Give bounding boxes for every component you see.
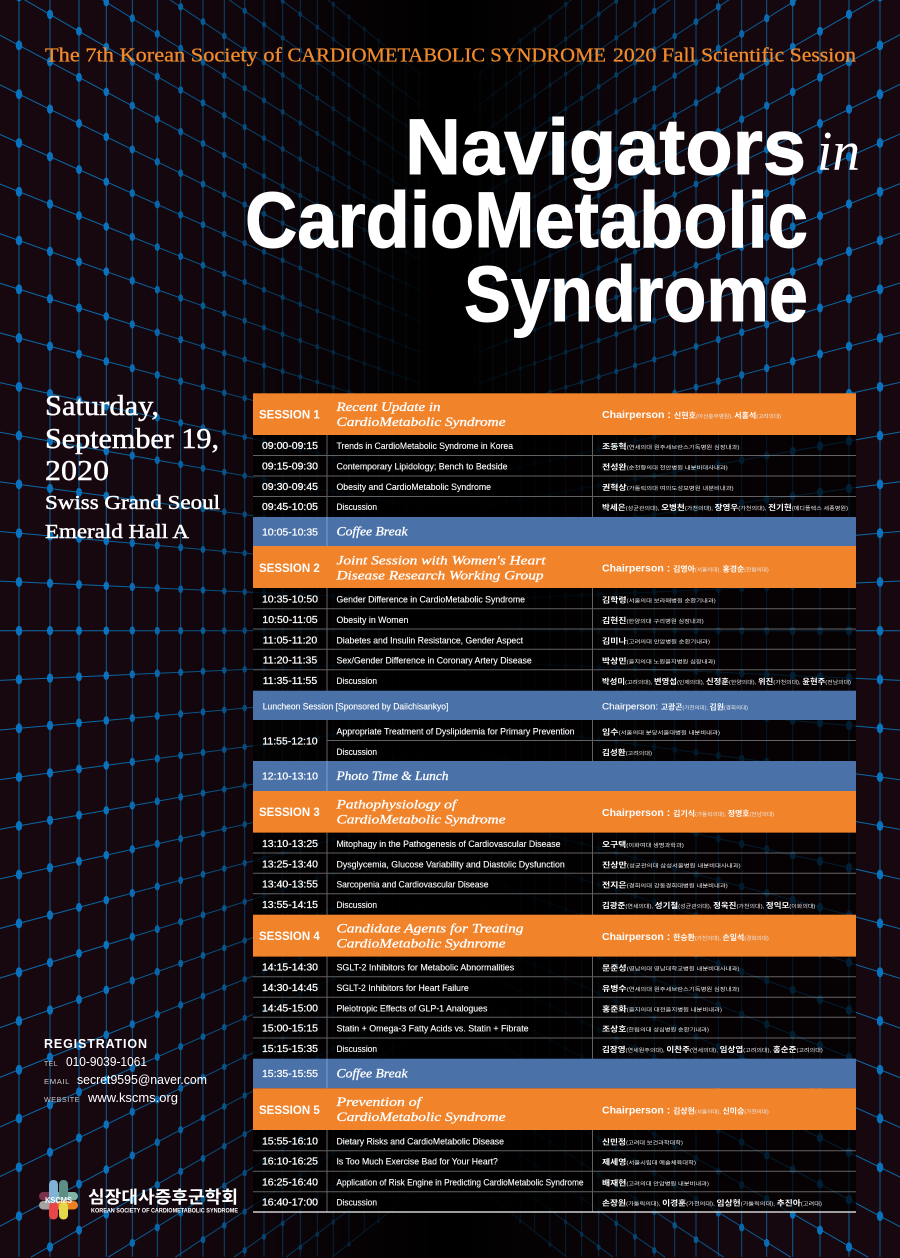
session 5 header: CardioMetabolic Syndrome: [336, 1109, 506, 1124]
session 2 header: Joint Session with Women's Heart: [336, 552, 546, 567]
date and venue: Swiss Grand Seoul: [45, 492, 220, 514]
session 3 schedule rows: Sarcopenia and Cardiovascular Disease: [336, 880, 488, 890]
session 4 schedule rows: 유병수 (연세의대 원주세브란스기독병원 심장내과): [602, 984, 740, 993]
date and venue: [45, 391, 220, 543]
registration contact: EMAIL: [44, 1079, 70, 1086]
session 3 schedule rows: 13:40-13:55: [262, 879, 318, 891]
session 3 schedule rows: Mitophagy in the Pathogenesis of Cardiovascular Disease: [336, 839, 560, 849]
session 5 schedule rows: Application of Risk Engine in Predicting CardioMetabolic Syndrome: [336, 1177, 584, 1187]
coffee break 2: 15:35-15:55: [262, 1068, 318, 1080]
session 3 header: [253, 791, 856, 833]
session 4 schedule rows: SGLT-2 Inhibitors for Metabolic Abnormalities: [336, 963, 515, 973]
session 5 schedule rows: Dietary Risks and CardioMetabolic Disease: [336, 1136, 504, 1146]
session 1 schedule rows: 09:45-10:05: [262, 501, 318, 513]
registration contact: TEL: [44, 1061, 58, 1068]
date and venue: Saturday,: [45, 391, 159, 422]
session 2 schedule rows: Obesity in Women: [336, 615, 408, 625]
session 2 schedule rows: Sex/Gender Difference in Coronary Artery Disease: [336, 656, 532, 666]
session 5 header: Chairperson : 김상현 (서울의대), 신미승 (가천의대): [602, 1106, 769, 1116]
logo: KSCMS: [39, 1180, 78, 1220]
session 1 schedule rows: 09:15-09:30: [262, 460, 318, 472]
session 4 header: Chairperson : 한승환 (가천의대), 손일석 (경희의대): [602, 932, 769, 943]
session 2 schedule rows: 김학령 (서울의대 보라매병원 순환기내과): [602, 596, 716, 605]
registration contact: REGISTRATION: [44, 1037, 147, 1051]
session 4 schedule rows: 15:15-15:35: [262, 1043, 318, 1055]
coffee break 1: Coffee Break: [336, 524, 408, 539]
session 4 schedule rows: 14:45-15:00: [262, 1002, 318, 1014]
session 3 schedule rows: 13:10-13:25: [262, 838, 318, 850]
session 5 schedule rows: 신민정 (고려대 보건과학대학): [602, 1137, 683, 1146]
session 5 header: Prevention of: [335, 1094, 424, 1109]
session 3 header: Chairperson : 김기식 (가톨릭의대), 정명호 (전남의대): [602, 808, 774, 819]
session 4 header: [253, 915, 856, 957]
session 2 schedule rows: Gender Difference in CardioMetabolic Syndrome: [336, 595, 525, 605]
luncheon schedule rows: Discussion: [336, 747, 377, 757]
session 2 schedule rows: 10:50-11:05: [262, 614, 318, 626]
registration contact: www.kscms.org: [87, 1091, 178, 1105]
session 1 schedule rows: 09:30-09:45: [262, 481, 318, 493]
luncheon session header: Luncheon Session [Sponsored by Daiichisankyo]: [263, 701, 448, 711]
session 2 schedule rows: 10:35-10:50: [262, 594, 318, 606]
session 2 schedule rows: [253, 588, 856, 691]
session 4 header: SESSION 4: [259, 931, 320, 943]
photo time and lunch: Photo Time & Lunch: [335, 768, 448, 783]
session 3 schedule rows: 13:55-14:15: [262, 899, 318, 911]
session 1 schedule rows: 조동혁 (연세의대 원주세브란스기독병원 심장내과): [602, 442, 740, 451]
luncheon schedule rows: 김성환 (고려의대): [602, 748, 652, 757]
main title: Syndrome: [464, 249, 808, 338]
session 2 schedule rows: 11:05-11:20: [263, 634, 317, 646]
subtitle: 2020 Fall Scientific Session: [613, 44, 856, 66]
coffee break 1: 10:05-10:35: [262, 526, 318, 538]
session 5 schedule rows: 손장원 (가톨릭의대), 이경훈 (가천의대), 임상현 (가톨릭의대), 추진아 (고려대): [602, 1199, 822, 1208]
session 1 schedule rows: 전성완 (순천향의대 천안병원 내분비대사내과): [602, 462, 728, 471]
session 4 schedule rows: 조상호 (한림의대 성심병원 순환기내과): [602, 1025, 709, 1034]
session 3 schedule rows: [253, 833, 856, 915]
session 4 schedule rows: 홍준화 (을지의대 대전을지병원 내분비내과): [602, 1004, 722, 1013]
luncheon schedule rows: 11:55-12:10: [262, 736, 318, 748]
session 5 schedule rows: Is Too Much Exercise Bad for Your Heart?: [336, 1157, 498, 1167]
date and venue: September 19,: [45, 424, 219, 455]
registration contact: WEBSITE: [44, 1097, 80, 1104]
session 1 header: Chairperson : 신현호 (아산충무병원), 서홍석 (고려의대): [602, 410, 781, 421]
session 1 schedule rows: Obesity and CardioMetabolic Syndrome: [336, 482, 491, 492]
session 1 schedule rows: [253, 435, 856, 517]
session 5 schedule rows: 16:25-16:40: [262, 1176, 318, 1188]
session 4 schedule rows: 14:30-14:45: [262, 982, 318, 994]
session 2 schedule rows: 11:20-11:35: [263, 655, 317, 667]
session 3 schedule rows: 진상만 (성균관의대 삼성서울병원 내분비대사내과): [602, 860, 741, 869]
session 4 schedule rows: 문준성 (영남의대 영남대학교병원 내분비대사내과): [602, 964, 740, 973]
society name: 심장대사증후군학회: [88, 1183, 238, 1208]
main title: Navigators: [405, 102, 806, 191]
session 4 schedule rows: Statin + Omega-3 Fatty Acids vs. Statin + Fibrate: [336, 1024, 529, 1034]
session 3 schedule rows: Discussion: [336, 900, 377, 910]
session 1 schedule rows: 09:00-09:15: [262, 440, 318, 452]
photo time and lunch: [253, 761, 856, 791]
session 5 schedule rows: 16:10-16:25: [262, 1156, 318, 1168]
session 4 header: Candidate Agents for Treating: [336, 921, 524, 936]
session 5 schedule rows: [253, 1130, 856, 1212]
session 1 header: [253, 393, 856, 435]
session 4 schedule rows: 김장영 (연세원주의대), 이찬주 (연세의대), 임상엽 (고려의대), 홍순준 (고려의대): [602, 1045, 823, 1054]
registration contact: [44, 1037, 207, 1105]
session 1 header: CardioMetabolic Syndrome: [336, 414, 506, 429]
session 3 schedule rows: 김광준 (연세의대), 성기철 (성균관의대), 정욱진 (가천의대), 정익모 (이화의대): [602, 901, 816, 910]
session 2 schedule rows: 김미나 (고려의대 안암병원 순환기내과): [602, 636, 710, 645]
main title: in: [817, 121, 860, 183]
session 3 schedule rows: 오구택 (이화여대 생명과학과): [602, 840, 684, 849]
luncheon schedule rows: 임수 (서울의대 분당서울대병원 내분비내과): [602, 728, 720, 737]
registration contact: 010-9039-1061: [66, 1055, 147, 1069]
registration contact: secret9595@naver.com: [77, 1073, 207, 1087]
date and venue: 2020: [45, 456, 109, 487]
session 4 schedule rows: [253, 957, 856, 1059]
date and venue: Emerald Hall A: [45, 521, 189, 543]
luncheon schedule rows: Appropriate Treatment of Dyslipidemia for Primary Prevention: [336, 727, 574, 737]
session 2 schedule rows: 박상민 (을지의대 노원을지병원 심장내과): [602, 657, 716, 666]
session 4 schedule rows: SGLT-2 Inhibitors for Heart Failure: [336, 983, 469, 993]
session 4 header: CardioMetabolic Sydnrome: [336, 936, 506, 951]
session 5 schedule rows: Discussion: [336, 1198, 377, 1208]
main title: CardioMetabolic: [245, 175, 808, 264]
subtitle: The 7th Korean Society of: [45, 44, 282, 66]
session 2 schedule rows: 11:35-11:55: [263, 675, 317, 687]
session 1 schedule rows: Contemporary Lipidology; Bench to Bedside: [336, 461, 508, 471]
session 2 header: [253, 546, 856, 588]
session 2 schedule rows: 박성미 (고려의대), 변영섭 (인제의대), 신정훈 (한양의대), 위진 (가천의대), 윤현주 (전남의대): [602, 677, 851, 686]
subtitle: [45, 44, 856, 66]
coffee break 2: Coffee Break: [336, 1065, 408, 1080]
session 1 schedule rows: 박세은 (성균관의대), 오병천 (가천의대), 장영우 (가천의대), 전기현 (메디플렉스 세종병원): [602, 503, 848, 512]
main title: [245, 102, 860, 338]
session 4 schedule rows: Pleiotropic Effects of GLP-1 Analogues: [336, 1003, 488, 1013]
session 3 header: Pathophysiology of: [335, 796, 459, 811]
session 5 header: SESSION 5: [259, 1105, 320, 1117]
luncheon schedule rows: [253, 720, 856, 761]
session 2 header: Disease Research Working Group: [335, 567, 544, 582]
session 2 schedule rows: Discussion: [336, 676, 377, 686]
logo: KSCMS: KSCMS: [45, 1196, 73, 1205]
session 1 schedule rows: 권혁상 (가톨릭의대 여의도성모병원 내분비내과): [602, 483, 734, 492]
session 3 schedule rows: 전지은 (경희의대 강동경희대병원 내분비내과): [602, 881, 728, 890]
session 4 schedule rows: 14:15-14:30: [262, 962, 318, 974]
session 4 schedule rows: 15:00-15:15: [262, 1023, 318, 1035]
session 2 header: Chairperson : 김영아 (서울의대), 홍경순 (한림의대): [602, 564, 769, 574]
coffee break 2: [253, 1059, 856, 1088]
session 5 schedule rows: 16:40-17:00: [262, 1197, 318, 1209]
session 1 schedule rows: Discussion: [336, 502, 377, 512]
coffee break 1: [253, 517, 856, 546]
luncheon session header: Chairperson: 고광곤 (가천의대), 김원(경희의대): [602, 701, 748, 711]
session 1 header: SESSION 1: [259, 409, 320, 421]
session 3 schedule rows: 13:25-13:40: [262, 858, 318, 870]
photo time and lunch: 12:10-13:10: [262, 771, 318, 783]
luncheon session header: [253, 691, 856, 720]
session 1 schedule rows: Trends in CardioMetabolic Syndrome in Korea: [336, 441, 514, 451]
session 3 schedule rows: Dysglycemia, Glucose Variability and Diastolic Dysfunction: [336, 859, 565, 869]
session 5 schedule rows: 15:55-16:10: [262, 1135, 318, 1147]
session 5 schedule rows: 제세영 (서울시립대 예술체육대학): [602, 1158, 696, 1167]
session 5 header: [253, 1088, 856, 1130]
session 4 schedule rows: Discussion: [336, 1044, 377, 1054]
session 2 schedule rows: Diabetes and Insulin Resistance, Gender Aspect: [336, 635, 523, 645]
session 3 header: SESSION 3: [259, 807, 320, 819]
subtitle: CARDIOMETABOLIC SYNDROME: [288, 44, 606, 66]
session 3 header: CardioMetabolic Syndrome: [336, 811, 506, 826]
session 2 schedule rows: 김현진 (한양의대 구리병원 심장내과): [602, 616, 704, 625]
society name: KOREAN SOCIETY OF CARDIOMETABOLIC SYNDROME: [91, 1208, 238, 1214]
session 5 schedule rows: 배재현 (고려의대 안암병원 내분비내과): [602, 1178, 709, 1187]
session 2 header: SESSION 2: [259, 563, 320, 575]
session 1 header: Recent Update in: [335, 399, 440, 414]
